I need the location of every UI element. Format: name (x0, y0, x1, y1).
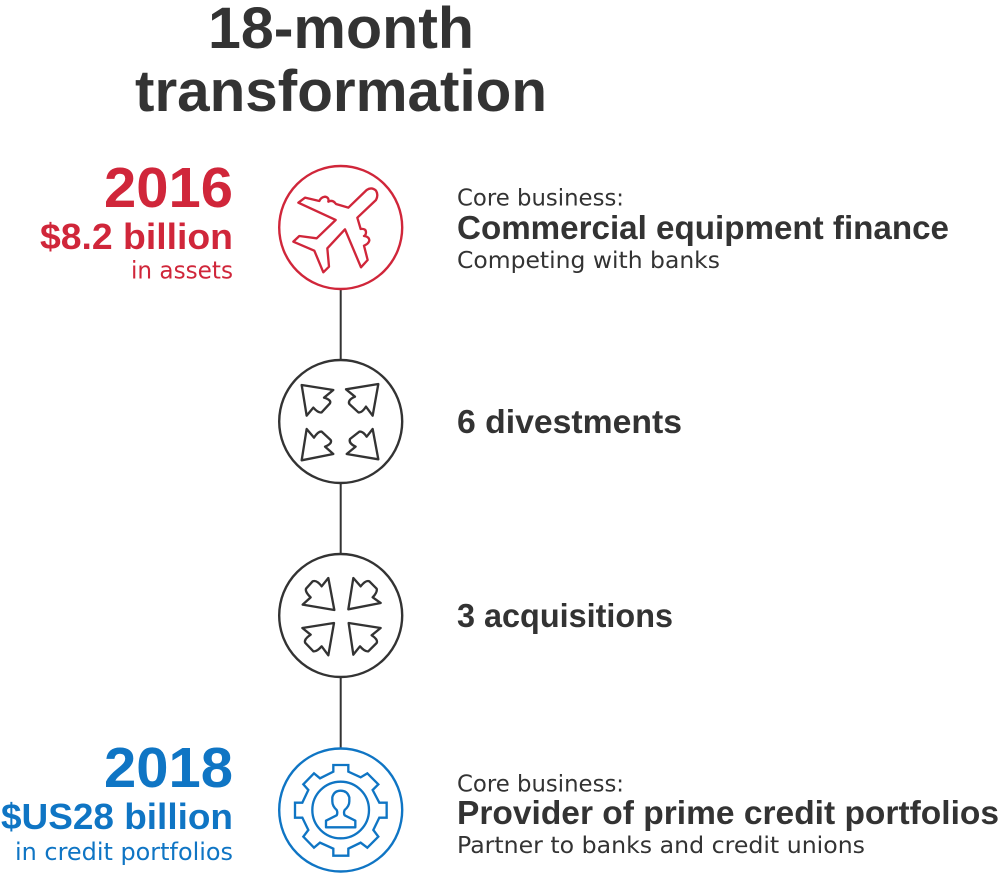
2016 label: year and assets: 2016 (104, 156, 233, 220)
icon: gear with person in blue circle (279, 748, 402, 872)
icon: four arrows pointing inward (279, 554, 402, 677)
2016 label: year and assets (40, 156, 233, 284)
2018 label: year and credit portfolios: $US28 billion (1, 796, 233, 837)
2018 core business text: Provider of prime credit portfolios (457, 794, 999, 831)
timeline connector lines (340, 290, 342, 748)
icon: airplane in red circle (279, 166, 402, 289)
2016 label: year and assets: in assets (131, 256, 233, 284)
2018 core business text: Core business: (457, 772, 624, 798)
2016 core business text: Core business: (457, 186, 624, 212)
2016 label: year and assets: $8.2 billion (40, 216, 233, 257)
2018 label: year and credit portfolios (1, 736, 233, 866)
icon: four arrows pointing outward (279, 360, 402, 483)
2016 core business text: Commercial equipment finance (457, 209, 949, 246)
title: transformation (135, 59, 547, 124)
3 acquisitions label: 3 acquisitions (457, 597, 673, 634)
2016 core business text: Competing with banks (457, 248, 720, 274)
6 divestments label: 6 divestments (457, 403, 682, 440)
2018 core business text (457, 772, 999, 859)
2016 core business text (457, 186, 949, 274)
title (135, 0, 547, 124)
2018 label: year and credit portfolios: 2018 (104, 736, 233, 800)
2018 core business text: Partner to banks and credit unions (457, 833, 865, 859)
2018 label: year and credit portfolios: in credit portfolios (15, 838, 233, 866)
